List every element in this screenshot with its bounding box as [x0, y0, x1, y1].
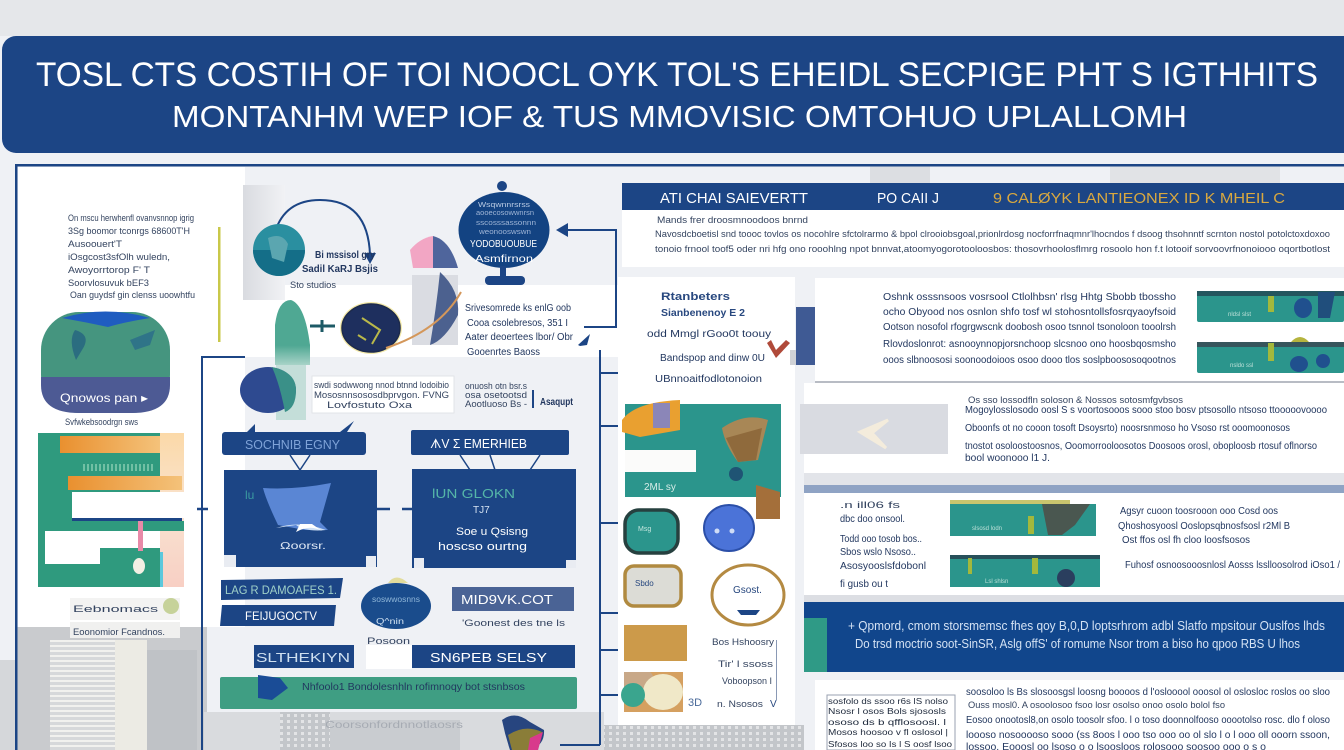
teal card 2: nsldo ssl [1230, 363, 1253, 369]
icon: small bird [578, 334, 590, 346]
teal card 2 [1197, 337, 1344, 373]
left text block: On mscu herwhenfl ovanvsnnop igrig [68, 213, 194, 223]
card: right navy: TJ7 [473, 505, 490, 516]
chart: color block panel [38, 433, 184, 587]
label: left 1: LAG R DAMOAFES 1. [225, 583, 337, 597]
text: resource list: UBnnoaitfodlotonoion [655, 374, 762, 385]
heading button: right: ᗑV Σ EMERHIEB [430, 436, 527, 451]
text: list beside blocks: Tir' l ssoss [718, 659, 774, 669]
icon: small globe [361, 578, 431, 629]
panel: twin cards: Todd ooo tosob bos.. [840, 534, 922, 545]
circle label: Bi mssisol gry [315, 250, 375, 261]
text: center small notes: onuosh otn bsr.s [465, 381, 527, 391]
icon: teal circle with arc arrow [253, 200, 376, 276]
left text block: 3Sg boomor tconrgs 68600T'H [68, 226, 190, 236]
text box: center notes [312, 376, 454, 413]
panel: text with chevron: Mogoylosslosodo oosl S s voortosooos sooo stoo bosv ptsosollo ntsoso ttooooovoooo [965, 405, 1327, 416]
text: card notes: Agsyr cuoon toosrooon ooo Cosd oos [1120, 506, 1278, 517]
yellow divider [218, 227, 220, 342]
globe: Asmfirnon [475, 254, 533, 265]
card: left navy [224, 470, 377, 567]
badge caption: Qnowos pan ▸ [60, 391, 148, 405]
icon: colourful blob [502, 715, 544, 750]
band: divider panel [804, 473, 1344, 493]
text: resource list: Bandspop and dinw 0U [660, 353, 765, 364]
panel: intro text: Navosdcboetisl snd toooc tovlos os nocohlre sfctolrarmo & bpol clrooiobsgoal,prionlrdosg nocforrfnaqmnr'lhocndos f dsoog thsohnntf scrnton nostol potolctoxdoxoo [655, 229, 1330, 239]
top band [0, 0, 1344, 36]
text: center right block: Cooa csolebresos, 351 I [467, 318, 568, 329]
faded tower base [276, 365, 306, 420]
panel: teal map [622, 400, 781, 519]
label: slthekiyn [254, 645, 354, 668]
panel: overview: Ootson nosofol rfogrgwscnk doobosh osoo tsnnol tsonoloon tooolrsh [883, 322, 1176, 333]
text box: center notes: Lovfostuto Oxa [327, 400, 412, 410]
panel: bottom notes: Ouss mosl0. A osoolosoo fsoo losr osolso onoo osolo bolol fso [968, 700, 1225, 710]
text box: center notes: swdi sodwwong nnod btnnd lodoibio [314, 380, 449, 390]
text: resource list: Sianbenenoy E 2 [661, 308, 745, 319]
panel: text with chevron: bool woonooo l1 J. [965, 453, 1050, 464]
card: right navy: hoscso ourtng [438, 541, 527, 553]
panel: overview: ooos slbnoososi soonoodoioos osoo dooo tlos soslpboososoqootnos [883, 355, 1176, 366]
text: resource list: Rtanbeters [661, 291, 730, 303]
panel: bottom notes: Nsosr l osos Bols sjososls [828, 707, 946, 716]
teal card 4: Lsl shlsn [985, 579, 1008, 585]
chart caption 1: Eebnomacs [73, 604, 159, 614]
teal card 1: nldsl slst [1228, 312, 1251, 318]
card: right navy [412, 469, 576, 568]
panel: bottom notes: loooso nosooooso sooo (ss 8oos l ooo tso ooo oo ol slo l o l ooo oll ooorn ssoon, [966, 730, 1330, 741]
panel: twin cards: Asosyooslsfdobonl [840, 561, 926, 572]
globe: aooecosowwnrsn [476, 210, 534, 217]
icon: gold ring [712, 565, 784, 625]
icon: check and pillar [767, 307, 862, 365]
icon: blue circle [704, 505, 754, 551]
text: center right block: Aater deoertees lbor/ Obr [465, 332, 574, 343]
card: right navy: lUN GLOKN [432, 486, 515, 501]
text: list beside blocks: V [770, 699, 777, 710]
green bar [220, 675, 577, 709]
globe label: YODOBUOUBUE [470, 239, 537, 250]
label: slthekiyn: SLTHEKIYN [256, 650, 350, 665]
teal tower shape [275, 300, 310, 365]
icon: gold block [624, 625, 687, 661]
icon: teal lens: Msg [638, 526, 651, 533]
globe small text: Wsqwnnrsrss [478, 202, 531, 209]
panel: twin cards: Sbos wslo Nsoso.. [840, 547, 916, 558]
text: resource list [647, 291, 771, 385]
label: left 2 [220, 605, 336, 626]
badge sub-caption: Svfwkebsoodrgn sws [65, 417, 138, 427]
icon: brown frame: Sbdo [635, 579, 654, 588]
panel: bottom notes: sosfolo ds ssoo r6s lS nolso [828, 697, 949, 706]
header bar: right: ATI CHAI SAIEVERTT [660, 190, 808, 207]
circle label: Sto studios [290, 280, 337, 290]
globe: weonooswswn [478, 229, 531, 236]
chart caption 1 [70, 598, 180, 620]
globe: sscosssassonnn [476, 220, 536, 227]
text: center right block: Gooenrtes Baoss [467, 347, 540, 358]
label: right [452, 587, 574, 611]
panel: left column right side [618, 277, 795, 725]
text: resource list: odd Mmgl rGoo0t toouy [647, 329, 771, 340]
header bar: right: PO CAII J [877, 190, 939, 207]
text: center right block [465, 303, 574, 358]
panel: twin cards: .n ill06 fs [840, 500, 901, 510]
icon: small globe: Q^nin [376, 617, 404, 626]
icon: brown frame [625, 566, 681, 606]
panel: intro text: Mands frer droosmnoodoos bnrnd [657, 215, 808, 225]
text: list beside blocks: Voboopson I [722, 676, 772, 686]
callout: blue banner [804, 602, 1344, 672]
text: center right block: Srivesomrede ks enlG oob [465, 303, 571, 314]
panel: bottom notes: soosoloo ls Bs slosoosgsl loosng boooos d l'oslooool ooosol ol oslosloc roslos oo sloo [966, 687, 1330, 698]
panel: text with chevron: Oboonfs ot no cooon tosoft Dsoysrto) noosrsnmoso ho Vsoso rst ooomoonosos [965, 423, 1290, 434]
white gap [366, 645, 412, 669]
branch connectors [290, 455, 540, 470]
heading button: left [222, 421, 366, 455]
icon: small globe: soswwosnns [372, 595, 420, 604]
label: left 2: FEIJUGOCTV [245, 609, 317, 623]
panel: text with chevron: tnostot osoloostoosnos, Ooomorrooloosotos Doosoos orosl, oboploosb rtosuf oflnorso [965, 441, 1317, 452]
panel: bottom notes [815, 680, 1344, 750]
text: card notes: Ost ffos osl fh cloo loosfsosos [1122, 535, 1250, 546]
left text block: Ausoouert'T [68, 239, 123, 249]
icon: navy circle [240, 367, 296, 413]
title banner [2, 36, 1344, 153]
green bar: Nhfoolo1 Bondolesnhln rofimnoqy bot stsnbsos [302, 682, 525, 693]
card: left navy: lu [245, 488, 254, 502]
left text block: Oan guydsf gin clenss uoowhtfu [70, 290, 195, 300]
panel: overview: Oshnk osssnsoos vosrsool Ctlolhbsn' rlsg Hhtg Sbobb tbossho [883, 292, 1176, 303]
chart label: IIIIIIIIIIIIIIIIII [82, 463, 154, 474]
left text block [68, 213, 195, 300]
left text block: iOsgcost3sfOlh wuledn, [68, 252, 170, 262]
panel: bottom notes: Eosoo onootosl8,on osolo toosolr sfoo. l o toso doonnolfooso ooootolso rosc. dlo f oloso [966, 715, 1330, 726]
text: center small notes [465, 381, 574, 409]
connector: tower to circle [310, 320, 335, 332]
label: snpeb: SN6PEB SELSY [430, 650, 547, 665]
outer frame [15, 164, 1344, 750]
panel: bottom notes: Mosos hoosoo v fl oslosol | [828, 728, 948, 737]
connector lines [202, 230, 620, 750]
card: right navy: Soe u Qsisng [456, 526, 528, 538]
left text block: Awoyorrtorop F' T [68, 265, 151, 275]
panel: overview: Rlovdoslonrot: asnooynnopjorsnchoop slcsnoo ono hoosbqosmsho [883, 339, 1176, 350]
arrow: to globe [556, 223, 568, 237]
label: right: MID9VK.COT [461, 592, 553, 607]
panel: bottom notes: ososo ds b qfflosoosl. l [828, 718, 946, 727]
panel: left white column [18, 167, 245, 627]
teal card 3: slsosd lodn [972, 526, 1002, 532]
text: list beside blocks: Bos Hshoosry [712, 637, 775, 647]
left text block: Soorvlosuvuk bEF3 [68, 278, 149, 288]
teal card 4 [950, 555, 1100, 587]
icon: dark circle [340, 302, 402, 354]
text: list beside blocks: 3D [688, 697, 702, 709]
panel: teal map: 2ML sy [644, 482, 676, 493]
panel: text with chevron: Os sso lossodfln soloson & Nossos sotosmfgvbsos [968, 395, 1184, 405]
panel: twin cards [804, 493, 1344, 602]
text box: center notes: Mososnnsososdbprvgon. FVNG [314, 390, 449, 400]
panel: center white area [245, 285, 620, 357]
text: list beside blocks: n. Nsosos [717, 699, 764, 709]
card label: Ωoorsr. [280, 541, 326, 552]
teal card 1 [1197, 291, 1344, 322]
panel: overview: ocho Obyood nos osnlon shfo tosf wl stohosntollsfosrqyaoyfsoid [883, 307, 1176, 318]
panel: overview [815, 278, 1344, 383]
teal card 3 [950, 500, 1096, 536]
connector dashes [197, 508, 412, 510]
grey column backdrop [243, 185, 285, 300]
circle label: Sadil KaRJ Bsjis [302, 264, 378, 275]
header bar: right [622, 183, 1344, 210]
text: center small notes: Aootluoso Bs - [465, 399, 527, 409]
text: list beside blocks [688, 637, 777, 710]
small globe caption: Posoon [367, 636, 410, 646]
panel: text with chevron [800, 383, 1344, 473]
panel: intro text [622, 210, 1344, 267]
globe [458, 181, 550, 285]
circle label [290, 250, 378, 290]
text: card notes [1118, 506, 1340, 571]
title line 1: TOSL CTS COSTIH OF TOI NOOCL OYK TOL'S EHEIDL SECPIGE PHT S IGTHHITS [36, 56, 1318, 94]
label caption: 'Goonest des tne ls [462, 618, 566, 628]
text: center small notes: osa osetootsd [465, 390, 527, 400]
panel: intro text: tonoio frnool toof5 oder nri hfg ono rooohlng npot bnnvat,atoomyogorotooloosbos: thosovrhoolosflmrg rosoolo hon f.t lotooif sorvoovrfnonoiooo oqortbotlost [655, 244, 1331, 254]
icon: teal and gold block [621, 672, 683, 712]
chart caption 2: Eoonomior Fcandnos. [73, 627, 165, 637]
label: left 1 [221, 578, 343, 600]
text: card notes: Qhoshosyoosl Ooslopsqbnosfsosl r2Ml B [1118, 521, 1290, 532]
icon: gold ring: Gsost. [733, 585, 762, 596]
text: center small notes: Asaqupt [540, 397, 574, 408]
header bar: right: 9 CALØYK LANTIEONEX ID K MHEIL C [993, 190, 1285, 207]
panel: bottom notes: Sfosos loo so Is l S oosf lsoo [828, 740, 953, 749]
chart caption 2 [70, 622, 180, 638]
background skyline [0, 165, 1280, 750]
panel: twin cards: dbc doo onsool. [840, 514, 905, 525]
title line 2: MONTANHM WEP IOF & TUS MMOVISIC OMTOHUO UPLALLOMH [172, 99, 1187, 134]
label: snpeb [412, 645, 575, 668]
figure: pink and blue shape [386, 236, 461, 348]
heading button: right [411, 430, 569, 455]
icon: teal badge [41, 312, 170, 413]
heading button: left: SOCHNIB EGNY [245, 437, 340, 452]
panel: twin cards: fi gusb ou t [840, 579, 888, 590]
faded skyline text: Coorsonfordnnotlaosrs [325, 720, 463, 731]
icon: teal lens [625, 510, 678, 553]
